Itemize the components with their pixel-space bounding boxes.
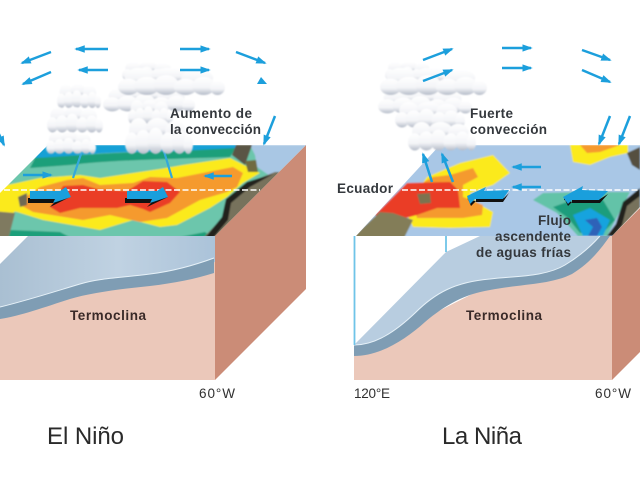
label: 120°E: 120°E [354,386,390,401]
equator dashed line [4,189,260,191]
wind arrows [0,49,275,176]
warm water layer [0,236,215,308]
label: Termoclina: Termoclina [466,308,542,323]
thermocline highlight [0,258,214,307]
label: Termoclina: Termoclina [70,308,146,323]
sea surface temperature map [340,145,640,240]
thermocline band [354,236,610,356]
front face: deep ocean [0,250,215,380]
panel: La Niña diagram [337,48,640,401]
stems and wind arrows behind clouds [423,154,453,182]
heading: La Niña: La Niña [442,423,523,450]
wind arrows [423,48,630,187]
label: second line: la convección [170,122,261,137]
label: Flujo: Flujo [538,213,571,228]
panel: El Niño diagram [0,49,320,401]
label: Aumento de la convección: Aumento de [170,106,252,121]
label: second line: convección [470,122,547,137]
large surface current arrows [467,186,608,206]
clouds [46,62,225,154]
warm water layer [354,236,600,345]
label: 60°W: 60°W [595,386,631,401]
right side face [215,145,306,380]
large surface current arrows [28,187,168,207]
label: Ecuador: Ecuador [337,181,394,196]
vertical edges of the cut-away [354,236,446,345]
thermocline highlight [354,236,600,345]
thermocline band [0,258,214,319]
sea surface temperature map [0,145,320,240]
equator dashed line [402,189,640,191]
convection stems [73,148,172,178]
label: 60°W: 60°W [199,386,235,401]
front face: deep ocean [354,236,612,380]
label: ascendente: ascendente [495,229,571,244]
clouds [378,62,487,150]
right side face [612,208,640,380]
label: Fuerte convección: Fuerte [470,106,513,121]
heading: El Niño: El Niño [47,423,124,450]
label: de aguas frías: de aguas frías [476,245,571,260]
